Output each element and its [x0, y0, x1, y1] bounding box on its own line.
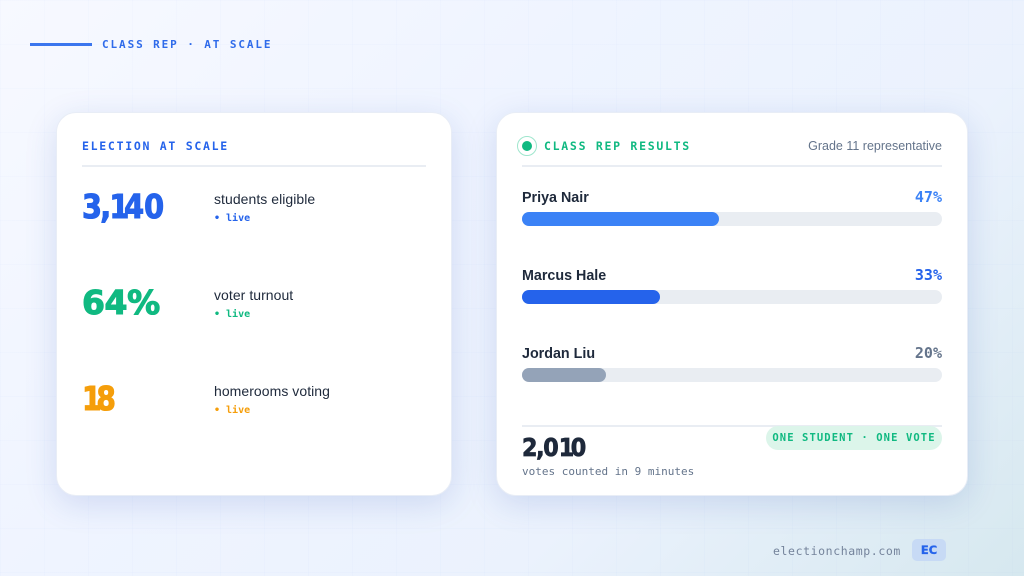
- badge: one student one vote: [766, 426, 942, 450]
- candidate name: Jordan Liu: [522, 346, 595, 362]
- live indicator: • live: [214, 213, 250, 224]
- stat value: 64%: [82, 283, 160, 322]
- icon: green status dot: [517, 136, 537, 156]
- total votes: 2,010: [522, 433, 586, 462]
- panel: class rep results: [496, 112, 968, 496]
- panel heading: class rep results: CLASS REP RESULTS: [544, 138, 691, 152]
- stat value: 18: [82, 379, 116, 418]
- stat label: voter turnout: [214, 287, 293, 303]
- stat: voter turnout: [82, 283, 294, 322]
- stat value: 3,140: [82, 187, 164, 226]
- candidate percent: 20%: [915, 344, 942, 362]
- eyebrow text: CLASS REP · AT SCALE: [102, 38, 272, 51]
- candidate percent: 47%: [915, 188, 942, 206]
- candidate percent: 33%: [915, 266, 942, 284]
- stat label: homerooms voting: [214, 383, 330, 399]
- header eyebrow: [30, 38, 272, 51]
- stat: students eligible: [82, 187, 315, 226]
- candidate: Jordan Liu: [522, 344, 942, 382]
- panel: election at scale: [56, 112, 452, 496]
- live indicator: • live: [214, 405, 250, 416]
- candidate name: Priya Nair: [522, 190, 589, 206]
- subtitle: grade 11: Grade 11 representative: [808, 139, 942, 153]
- votes caption: votes counted in 9 minutes: [522, 465, 694, 478]
- live indicator: • live: [214, 309, 250, 320]
- vote bar: [522, 368, 942, 382]
- candidate name: Marcus Hale: [522, 268, 606, 284]
- eyebrow line: [30, 42, 92, 46]
- vote bar: [522, 212, 942, 226]
- candidate: Marcus Hale: [522, 266, 942, 304]
- vote bar: [522, 290, 942, 304]
- footer logo badge: [912, 539, 946, 561]
- stat: homerooms voting: [82, 379, 330, 418]
- footer logo badge: EC: [921, 543, 937, 557]
- panel heading: election at scale: ELECTION AT SCALE: [82, 138, 229, 152]
- candidate: Priya Nair: [522, 188, 942, 226]
- badge: one student one vote: ONE STUDENT · ONE VOTE: [772, 432, 936, 444]
- stat label: students eligible: [214, 191, 315, 207]
- footer domain: electionchamp.com: [773, 544, 901, 558]
